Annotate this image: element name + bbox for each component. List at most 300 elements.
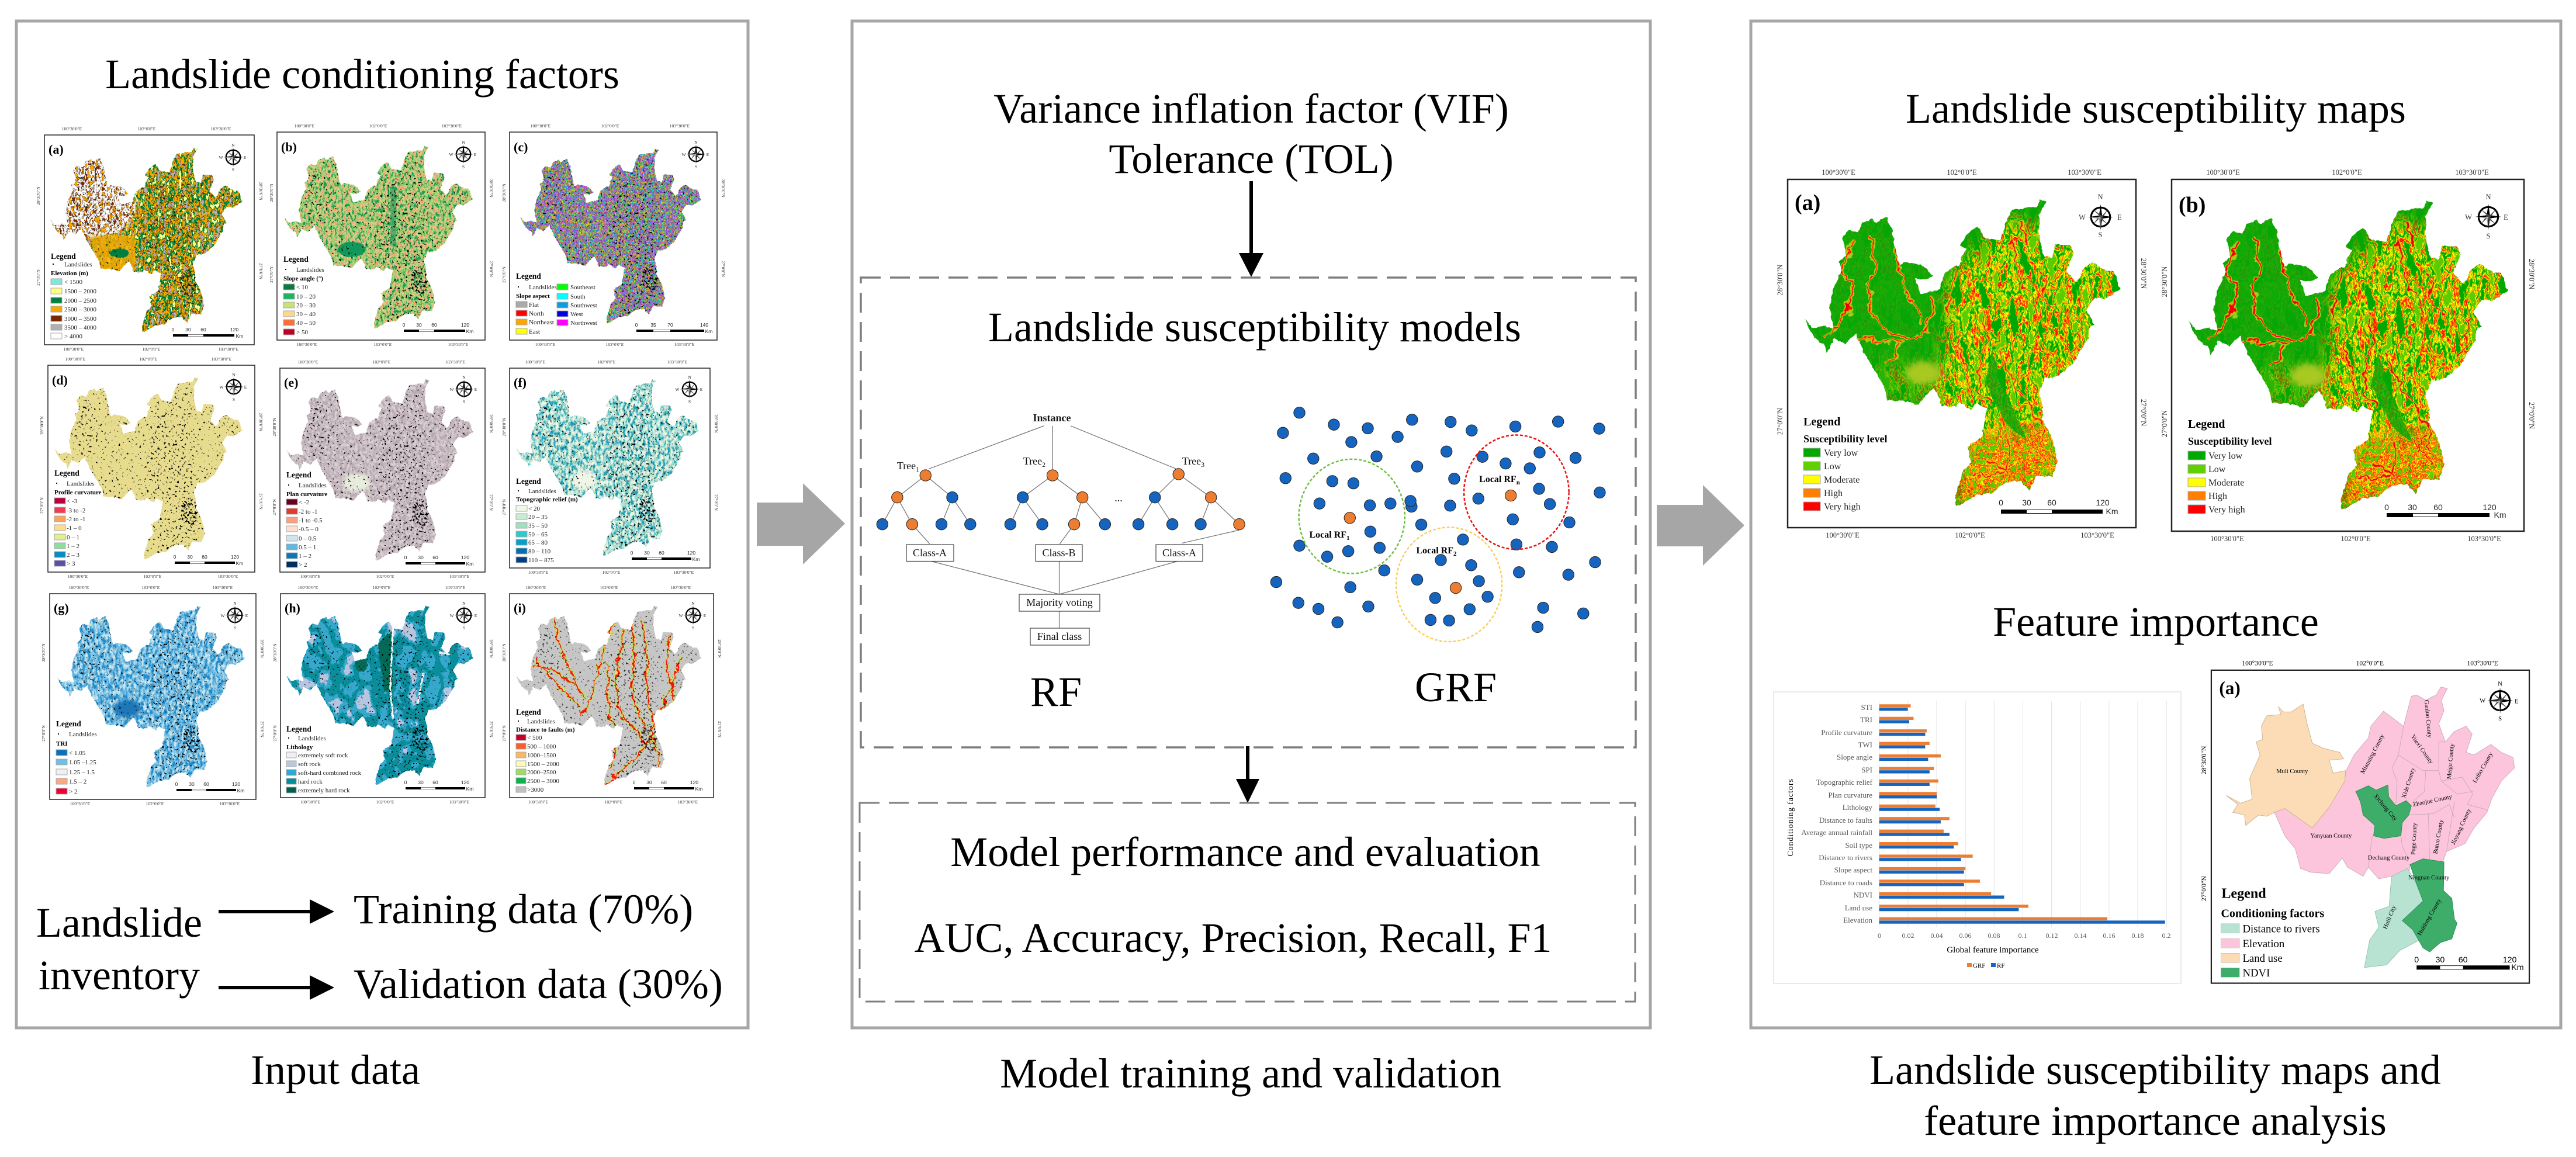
map (h): lithology: Legend [286, 725, 311, 733]
map: dominant conditioning factors by county: Meigu County [2446, 743, 2456, 780]
map (i): distance to faults: 102°0'0"E [600, 585, 618, 590]
map (h): lithology: 27°0'0"N [272, 725, 278, 742]
map (d): profile curvature: 0 [174, 554, 176, 560]
map (i): distance to faults: 0 [633, 780, 636, 785]
map (i): distance to faults: 102°0'0"E [605, 799, 623, 805]
map (g): TRI: 102°0'0"E [146, 801, 164, 806]
map (h): lithology: Landslides [298, 735, 326, 742]
map (h): lithology: 103°30'0"E [449, 799, 470, 805]
map (i): distance to faults: 30 [646, 780, 652, 785]
map (b): slope angle: 27°0'0"N [489, 261, 494, 277]
map: dominant conditioning factors by county: Zhaojue County [2412, 794, 2453, 808]
map (e): plan curvature: S [463, 399, 465, 404]
map (d): profile curvature: 103°30'0"E [212, 356, 232, 362]
map: susceptibility (b): 28°30'0"N [2160, 266, 2169, 297]
map (a): elevation: (a) [49, 142, 64, 157]
map (c): slope aspect: Landslides [529, 284, 557, 291]
map (i): distance to faults: Legend [516, 708, 541, 716]
map (e): plan curvature: -0.5 – 0 [299, 526, 318, 533]
map (b): slope angle: S [462, 164, 465, 169]
map: dominant conditioning factors by county: Distance to rivers [2242, 923, 2320, 936]
map (e): plan curvature: 102°0'0"E [376, 574, 394, 579]
map (c): slope aspect: 70 [667, 322, 673, 328]
map (h): lithology: soft-hard combined rock [298, 770, 362, 777]
map (b): slope angle: W [449, 152, 453, 157]
map (a): elevation: 100°30'0"E [64, 347, 84, 352]
map (g): TRI: 28°30'0"N [259, 639, 265, 658]
diagram: random forest: Class-A [1162, 547, 1196, 559]
map (g): TRI: 60 [203, 781, 209, 787]
bar chart: global feature importance: SPI [1861, 765, 1872, 774]
map (e): plan curvature: -2 to -1 [299, 508, 317, 515]
map (c): slope aspect: 35 [650, 322, 656, 328]
caption: results: feature importance analysis [1924, 1097, 2387, 1144]
map (e): plan curvature: 1 – 2 [299, 553, 311, 560]
map (c): slope aspect: E [707, 152, 709, 157]
map (a): elevation: 2000 – 2500 [64, 297, 97, 304]
map (g): TRI: < 1.05 [69, 750, 86, 757]
map (f): topographic relief: 0 [631, 550, 633, 556]
map: dominant conditioning factors by county: 28°30'0"N [2200, 746, 2208, 774]
caption: results [1869, 1047, 2441, 1144]
map: susceptibility (a): E [2117, 213, 2122, 221]
map (f): topographic relief: 50 – 65 [528, 531, 548, 538]
heading: feature importance: Feature importance [1993, 598, 2319, 645]
map (e): plan curvature: 27°0'0"N [272, 499, 277, 515]
map (b): slope angle: Km [466, 328, 473, 334]
map: susceptibility (b): N [2485, 193, 2491, 201]
diagram: random forest [877, 412, 1245, 645]
bar chart: global feature importance: NDVI [1854, 891, 1872, 899]
map (f): topographic relief [501, 359, 719, 575]
map (c): slope aspect: 0 [635, 322, 638, 328]
map: dominant conditioning factors by county: Huili City [2383, 905, 2398, 930]
map (i): distance to faults: 1000–1500 [527, 752, 556, 759]
arrow: to training data [219, 899, 334, 924]
diagram: geographical random forest: n [1516, 479, 1520, 486]
map (f): topographic relief: 28°30'0"N [714, 414, 719, 433]
map: susceptibility (a): 103°30'0"E [2068, 168, 2101, 176]
map: susceptibility (a) [1776, 168, 2148, 539]
map (d): profile curvature: W [219, 384, 224, 390]
map (a): elevation: 2500 – 3000 [64, 306, 97, 313]
map (i): distance to faults: S [692, 625, 694, 631]
map (e): plan curvature: 28°30'0"N [489, 414, 494, 433]
map: dominant conditioning factors by county: 30 [2435, 955, 2445, 965]
map (i): distance to faults: Landslides [527, 718, 555, 725]
map (a): elevation: 103°30'0"E [219, 347, 239, 352]
map (f): topographic relief: 60 [659, 550, 664, 556]
map: susceptibility (a): (a) [1795, 190, 1820, 215]
map (h): lithology: 102°0'0"E [373, 585, 391, 590]
map (d): profile curvature: N [232, 372, 236, 377]
map (b): slope angle: 102°0'0"E [369, 123, 387, 129]
map: dominant conditioning factors by county: S [2498, 715, 2502, 722]
map (c): slope aspect: W [681, 152, 686, 157]
map (d): profile curvature: 30 [187, 554, 193, 560]
bar chart: global feature importance: Soil type [1845, 841, 1872, 850]
map: susceptibility (a): S [2099, 231, 2103, 239]
map (h): lithology: W [449, 613, 454, 618]
map (f): topographic relief: 110 – 875 [528, 557, 554, 564]
map (d): profile curvature: > 3 [67, 560, 75, 567]
bar chart: global feature importance: Distance to rivers [1819, 853, 1872, 862]
map (g): TRI: 28°30'0"N [41, 643, 46, 662]
map (f): topographic relief: 100°30'0"E [525, 359, 546, 365]
map (a): elevation: 3500 – 4000 [64, 324, 97, 331]
map (e): plan curvature: Plan curvature [286, 491, 327, 498]
map (d): profile curvature: 120 [231, 554, 239, 560]
map (h): lithology: E [475, 613, 477, 618]
map (h): lithology: S [463, 625, 465, 631]
map (b): slope angle: 10 – 20 [296, 293, 316, 300]
map (a): elevation: 60 [200, 327, 206, 332]
diagram: geographical random forest: Local RF [1479, 474, 1516, 484]
map (a): elevation: S [232, 167, 234, 172]
arrow: model to results [1657, 485, 1744, 566]
map: susceptibility (b): (b) [2179, 193, 2205, 217]
map (b): slope angle: 40 – 50 [296, 320, 316, 327]
bar chart: global feature importance: GRF [1973, 962, 1985, 969]
diagram: random forest: 3 [1201, 460, 1204, 469]
map (d): profile curvature: Km [236, 560, 243, 566]
map (h): lithology: extremely hard rock [298, 787, 350, 794]
bar chart: global feature importance: 0.06 [1959, 931, 1972, 940]
map (c): slope aspect: Northwest [570, 320, 597, 327]
map: dominant conditioning factors by county: Puge County [2410, 822, 2418, 855]
heading: VIF and TOL: Tolerance (TOL) [1109, 136, 1394, 182]
bar chart: global feature importance: Plan curvature [1829, 791, 1872, 799]
map: susceptibility (b): S [2487, 232, 2491, 240]
map (h): lithology: extremely soft rock [298, 752, 348, 759]
diagram: geographical random forest: Local RF [1416, 546, 1453, 556]
map: susceptibility (b): Susceptibility level [2188, 435, 2272, 447]
map: susceptibility (a): 0 [1999, 498, 2003, 507]
map: susceptibility (b): Very low [2208, 451, 2243, 461]
map (e): plan curvature: 103°30'0"E [445, 359, 466, 365]
map (b): slope angle [269, 123, 494, 347]
map (f): topographic relief: W [675, 387, 680, 392]
bar chart: global feature importance: Slope aspect [1834, 865, 1872, 874]
map: dominant conditioning factors by county: Ganluo County [2423, 699, 2433, 739]
map (i): distance to faults: 100°30'0"E [528, 799, 549, 805]
map: susceptibility (b): Very high [2208, 505, 2245, 515]
map (a): elevation: 103°30'0"E [211, 126, 231, 131]
map: dominant conditioning factors by county: 0 [2414, 955, 2419, 965]
map: dominant conditioning factors by county: Leibo County [2472, 751, 2495, 784]
map (d): profile curvature: E [244, 384, 247, 390]
bar chart: global feature importance: Distance to faults [1819, 816, 1872, 825]
bar chart: global feature importance: 0.12 [2045, 931, 2058, 940]
map (h): lithology [271, 585, 494, 805]
map (g): TRI: 120 [232, 781, 240, 787]
map (d): profile curvature: Landslides [67, 480, 95, 487]
map: susceptibility (a): 100°30'0"E [1822, 168, 1855, 176]
map: susceptibility (a): Low [1824, 462, 1841, 472]
map (f): topographic relief: 102°0'0"E [598, 359, 616, 365]
label: RF: RF [1030, 668, 1082, 715]
map (g): TRI: Km [237, 788, 244, 794]
map: susceptibility (a): 30 [2022, 498, 2031, 507]
map (d): profile curvature: 28°30'0"N [258, 413, 264, 431]
map: susceptibility (a): Km [2106, 507, 2118, 516]
map (f): topographic relief: 27°0'0"N [501, 499, 507, 515]
map: dominant conditioning factors by county: Yuexi County [2409, 733, 2435, 765]
text block: landslide inventory: inventory [39, 952, 200, 999]
map (e): plan curvature: N [462, 375, 466, 380]
map (c): slope aspect: Flat [529, 302, 539, 309]
map (e): plan curvature: 0 – 0.5 [299, 535, 317, 542]
bar chart: global feature importance: 0.16 [2103, 931, 2115, 940]
map (e): plan curvature: 103°30'0"E [449, 574, 470, 579]
map: susceptibility (b): 60 [2433, 503, 2443, 512]
map (g): TRI: E [245, 613, 248, 618]
map (g): TRI: 0 [175, 781, 178, 787]
map: dominant conditioning factors by county: Xide County [2401, 767, 2417, 799]
map (b): slope angle: E [474, 152, 477, 157]
map: susceptibility (b): 102°0'0"E [2332, 168, 2362, 176]
map (f): topographic relief: E [700, 387, 703, 392]
map: susceptibility (b): E [2504, 213, 2508, 221]
map (c): slope aspect: Northeast [529, 319, 554, 326]
map (b): slope angle: 100°30'0"E [297, 342, 317, 347]
arrow: to evaluation [1236, 746, 1259, 803]
map (e): plan curvature [271, 359, 494, 579]
map (f): topographic relief: 80 – 110 [528, 548, 551, 555]
diagram: random forest: Majority voting [1026, 597, 1093, 608]
map (e): plan curvature: 0.5 – 1 [299, 544, 316, 551]
map: susceptibility (b): 103°30'0"E [2467, 535, 2501, 543]
map (i): distance to faults: 120 [690, 780, 698, 785]
bar chart: global feature importance: Distance to roads [1820, 878, 1872, 887]
map (c): slope aspect: 27°0'0"N [501, 266, 507, 283]
map (a): elevation: 102°0'0"E [143, 347, 161, 352]
map (c): slope aspect: 103°30'0"E [670, 123, 690, 129]
map (i): distance to faults: 2500 – 3000 [527, 778, 560, 785]
map (g): TRI: 30 [189, 781, 195, 787]
map (h): lithology: 103°30'0"E [445, 585, 466, 590]
map: susceptibility (a): 102°0'0"E [1947, 168, 1977, 176]
map: susceptibility (a): 28°30'0"N [1776, 265, 1784, 295]
map (f): topographic relief: (f) [514, 375, 527, 390]
map (d): profile curvature: 27°0'0"N [258, 493, 264, 510]
map: dominant conditioning factors by county: Conditioning factors [2221, 907, 2324, 920]
map (h): lithology: hard rock [298, 778, 323, 785]
map (a): elevation: W [219, 155, 223, 160]
map (b): slope angle: Landslides [296, 266, 324, 273]
arrow: to validation data [219, 975, 334, 1000]
map: susceptibility (a): Moderate [1824, 475, 1860, 485]
map: susceptibility (a): 60 [2047, 498, 2056, 507]
label: GRF: GRF [1415, 664, 1497, 711]
map (b): slope angle: 28°30'0"N [269, 183, 274, 202]
bar chart: global feature importance: RF [1997, 962, 2004, 969]
map (c): slope aspect: 102°0'0"E [606, 342, 624, 347]
map (e): plan curvature: > 2 [299, 562, 307, 569]
map (e): plan curvature: 0 [404, 555, 407, 560]
map (d): profile curvature: -3 to -2 [67, 507, 85, 514]
map (f): topographic relief: Topographic relief (m) [516, 496, 578, 503]
map: susceptibility (a): 100°30'0"E [1826, 531, 1860, 539]
map (f): topographic relief: 103°30'0"E [674, 570, 694, 575]
map: susceptibility (b): 27°0'0"N [2160, 410, 2169, 437]
map (d): profile curvature: 1 – 2 [67, 543, 79, 550]
map (i): distance to faults: 103°30'0"E [671, 585, 691, 590]
heading: landslide conditioning factors: Landslide conditioning factors [105, 51, 619, 98]
map (g): TRI: (g) [54, 601, 69, 615]
map (e): plan curvature: (e) [284, 375, 298, 390]
map: dominant conditioning factors by county: Km [2511, 963, 2524, 972]
map (h): lithology: Km [466, 786, 473, 792]
map: susceptibility (b): 102°0'0"E [2340, 535, 2371, 543]
map: dominant conditioning factors by county: Land use [2242, 952, 2283, 965]
map (h): lithology: 0 [404, 780, 407, 785]
map (c): slope aspect: West [570, 311, 583, 318]
map (f): topographic relief: 100°30'0"E [528, 570, 549, 575]
dashed panel: evaluation [860, 803, 1635, 1002]
map: susceptibility (b): 100°30'0"E [2206, 168, 2240, 176]
diagram: geographical random forest: 2 [1453, 550, 1457, 557]
map (d): profile curvature: S [233, 397, 235, 402]
map (i): distance to faults: (i) [514, 601, 526, 615]
map (i): distance to faults: 60 [661, 780, 667, 785]
map (h): lithology: 60 [432, 780, 438, 785]
bar chart: global feature importance: 0 [1878, 931, 1881, 940]
map (c): slope aspect: 140 [700, 322, 708, 328]
map (a): elevation: > 4000 [64, 333, 82, 340]
map (a): elevation: E [244, 155, 247, 160]
bar chart: global feature importance: STI [1861, 703, 1872, 712]
diagram: random forest: Class-A [913, 547, 947, 559]
map (i): distance to faults: >3000 [527, 787, 544, 794]
diagram: geographical random forest: Local RF [1309, 530, 1346, 540]
map (g): TRI [41, 585, 265, 806]
map: susceptibility (b): Moderate [2208, 478, 2244, 488]
map: susceptibility (b): 100°30'0"E [2210, 535, 2244, 543]
map: susceptibility (a): Susceptibility level [1803, 433, 1888, 445]
map (a): elevation: 0 [172, 327, 175, 332]
bar chart: global feature importance: Land use [1845, 903, 1872, 912]
bar chart: global feature importance: 0.18 [2132, 931, 2144, 940]
text block: landslide inventory [36, 899, 202, 999]
bar chart: global feature importance: Profile curvature [1821, 728, 1872, 737]
map (a): elevation: 102°0'0"E [138, 126, 156, 131]
map: dominant conditioning factors by county: 60 [2459, 955, 2468, 965]
map (a): elevation: 27°0'0"N [36, 269, 41, 286]
map: susceptibility (a): W [2079, 213, 2086, 221]
map (i): distance to faults: 2000–2500 [527, 769, 556, 776]
map (a): elevation: Landslides [64, 261, 92, 268]
map: susceptibility (b): 28°30'0"N [2527, 259, 2536, 289]
map (a): elevation: Legend [51, 252, 76, 261]
map (g): TRI: 103°30'0"E [220, 801, 240, 806]
map (g): TRI: 103°30'0"E [213, 585, 233, 590]
map (i): distance to faults: 28°30'0"N [717, 639, 722, 658]
map: dominant conditioning factors by county: Dechang County [2368, 855, 2410, 861]
map: susceptibility (a): Very low [1824, 448, 1858, 458]
map (d): profile curvature: Profile curvature [54, 489, 102, 496]
bar chart: global feature importance: Elevation [1843, 916, 1872, 924]
map (b): slope angle: < 10 [296, 284, 308, 291]
heading: VIF and TOL: Variance inflation factor (VIF) [993, 85, 1509, 132]
diagram: random forest: ... [1114, 492, 1123, 504]
map (b): slope angle: 27°0'0"N [269, 266, 274, 283]
map: susceptibility (a): 120 [2096, 498, 2110, 507]
bar chart: global feature importance [1774, 692, 2181, 983]
map (b): slope angle: 60 [431, 322, 437, 328]
map (b): slope angle: 102°0'0"E [374, 342, 392, 347]
map (b): slope angle: (b) [281, 140, 297, 154]
map (h): lithology: (h) [285, 601, 300, 615]
map (c): slope aspect: Southeast [570, 284, 595, 291]
map (b): slope angle: Slope angle (°) [283, 275, 323, 282]
panel: results frame [1751, 21, 2561, 1028]
map: susceptibility (b): High [2208, 491, 2227, 501]
map: dominant conditioning factors by county: 100°30'0"E [2242, 659, 2273, 667]
map (c): slope aspect [501, 123, 726, 347]
map (d): profile curvature: 100°30'0"E [65, 356, 86, 362]
map (a): elevation: 120 [230, 327, 238, 332]
heading: susceptibility maps: Landslide susceptibility maps [1906, 85, 2406, 132]
map (f): topographic relief: 35 – 50 [528, 522, 548, 529]
map (e): plan curvature: Landslides [299, 482, 327, 489]
map (a): elevation: Elevation (m) [51, 270, 88, 277]
map (d): profile curvature: < -3 [67, 498, 78, 505]
map (f): topographic relief: 103°30'0"E [667, 359, 688, 365]
map (d): profile curvature: -1 – 0 [67, 525, 82, 532]
map: dominant conditioning factors by county: Ningnan County [2408, 875, 2450, 881]
diagram: random forest: Tree [897, 460, 916, 472]
diagram: geographical random forest [1270, 407, 1605, 642]
map: dominant conditioning factors by county: 27°0'0"N [2200, 875, 2208, 901]
map (e): plan curvature: Km [466, 561, 473, 567]
map (g): TRI: 100°30'0"E [69, 585, 89, 590]
caption: results: Landslide susceptibility maps and [1869, 1047, 2441, 1093]
map: dominant conditioning factors by county: Jinyang County [2450, 808, 2473, 846]
map (d): profile curvature: 100°30'0"E [68, 574, 88, 579]
diagram: random forest: 1 [916, 465, 919, 473]
arrow: to susceptibility models [1239, 181, 1263, 277]
map (d): profile curvature: 102°0'0"E [144, 574, 162, 579]
map (b): slope angle: 100°30'0"E [295, 123, 315, 129]
map (d): profile curvature: (d) [52, 373, 68, 387]
map (d): profile curvature: 60 [202, 554, 207, 560]
caption: input data: Input data [251, 1047, 420, 1093]
map (b): slope angle: 30 [416, 322, 422, 328]
bar chart: global feature importance: TWI [1858, 740, 1872, 749]
map (b): slope angle: 103°30'0"E [448, 342, 469, 347]
map (i): distance to faults: 100°30'0"E [526, 585, 546, 590]
map (b): slope angle: Legend [283, 255, 309, 264]
map (i): distance to faults: N [691, 601, 695, 606]
map (e): plan curvature: < -2 [299, 499, 309, 506]
map (f): topographic relief: 30 [644, 550, 650, 556]
map: susceptibility (b): 30 [2408, 503, 2417, 512]
map (i): distance to faults: 27°0'0"N [717, 721, 722, 737]
caption: model training: Model training and validation [1000, 1050, 1501, 1097]
map (g): TRI: Landslides [69, 731, 97, 738]
map (i): distance to faults: 27°0'0"N [501, 725, 507, 742]
map (d): profile curvature [39, 356, 264, 579]
map: susceptibility (a): 27°0'0"N [1776, 408, 1784, 435]
map (b): slope angle: N [462, 140, 465, 145]
bar chart: global feature importance: Conditioning factors [1786, 778, 1795, 857]
map (d): profile curvature: 28°30'0"N [39, 416, 44, 435]
map (i): distance to faults [501, 585, 722, 805]
text: metrics: AUC, Accuracy, Precision, Recall, F1 [914, 914, 1552, 961]
map (a): elevation: 28°30'0"N [258, 182, 264, 200]
text: validation data: Validation data (30%) [354, 961, 723, 1007]
